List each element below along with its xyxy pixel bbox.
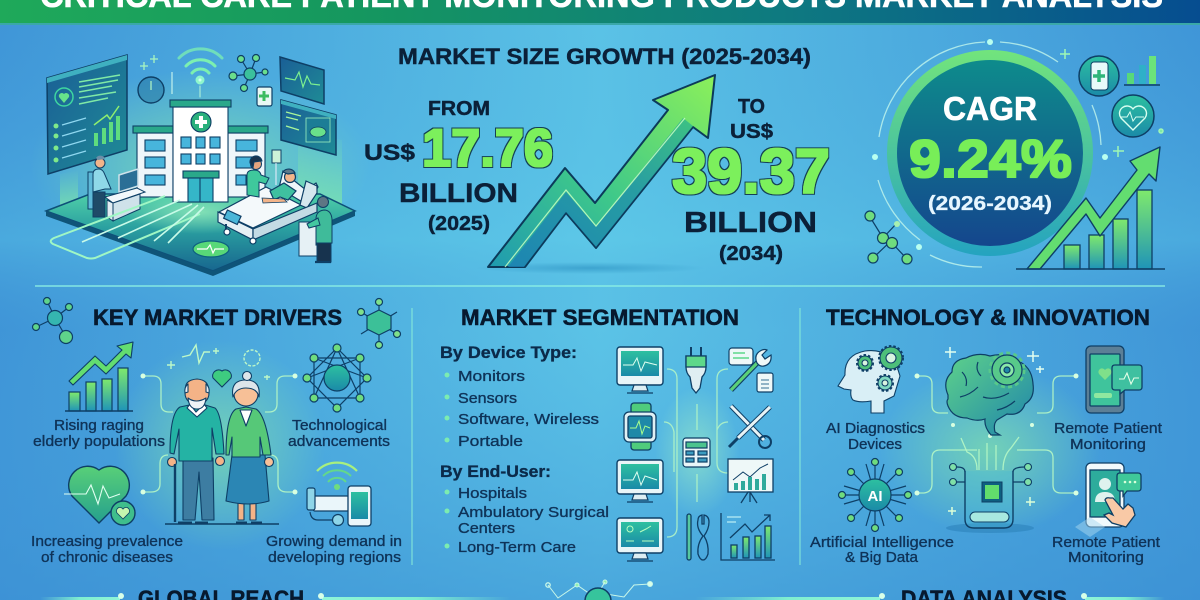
text: rising elderly populations: elderly populations [33,433,165,450]
hospital building [133,100,268,202]
list: by end user: Hospitals [458,485,527,502]
heading: KEY MARKET DRIVERS [93,305,342,330]
list: by device type [440,343,599,450]
icon: AI diagnostics head [838,346,903,413]
bottom band: global reach [40,586,510,600]
connectors [140,374,298,494]
list: by device type: Monitors [458,368,525,385]
icon: central module [683,438,710,467]
nurse [247,150,281,197]
icon: bar and line chart [721,513,775,560]
connectors [664,369,728,537]
icon: monitor 3 [617,518,663,561]
text: developing regions: developing regions [268,549,401,566]
elderly couple [165,372,279,524]
data screen left [47,55,127,174]
text: ai diagnostics devices [826,420,925,453]
icon: plug [686,347,706,393]
to value: 39.37 [672,137,830,207]
text: remote patient monitoring: Monitoring [1070,436,1146,453]
sparkles [1060,49,1163,157]
icon: mini bars [1124,56,1160,85]
list: by end user: By End-User: [440,462,551,481]
growth arrow [475,75,715,274]
bottom band: data analysis [695,586,1165,600]
text: artificial intelligence [810,534,954,566]
icon: wifi [179,49,222,97]
list: by end user: Ambulatory Surgical [458,504,609,521]
from value: BILLION [399,178,518,208]
icon: remote monitoring phone [1086,346,1142,413]
list: by device type: Portable [458,433,523,450]
list: by device type: Sensors [458,390,517,407]
section divider [35,285,1165,287]
text: technological advancements: Technological [292,417,387,434]
from value [364,98,553,235]
text: ai diagnostics devices: AI Diagnostics [826,420,925,437]
icon: molecule left [32,298,72,344]
platform emblem [193,241,229,257]
text: remote patient monitoring lower: Monitoring [1068,549,1144,566]
icon: network centre bottom [546,580,652,600]
from value: US$ [364,140,415,165]
CAGR badge: CAGR [943,90,1037,127]
sparkles and clock [138,55,172,103]
text: remote patient monitoring lower [1052,534,1161,566]
to value: BILLION [684,207,817,239]
to value: (2034) [719,243,783,265]
panel: market segmentation [440,305,775,561]
connectors [914,374,1078,496]
to value: US$ [730,121,773,143]
list: by device type: Software, Wireless [458,411,599,428]
market size growth heading: MARKET SIZE GROWTH (2025-2034) [398,44,811,69]
icon: hexagon molecule [358,298,400,348]
to value [672,96,830,265]
CAGR badge: 9.24% [909,130,1072,189]
CAGR badge [872,39,1108,267]
from value: 17.76 [422,119,553,178]
heading: TECHNOLOGY & INNOVATION [826,305,1150,330]
to value: TO [738,96,765,118]
panel: key market drivers [31,298,402,566]
platform [46,190,355,276]
icon: remote monitoring phone with hand [1075,463,1141,537]
icon: connected phone device [307,463,371,526]
text: remote patient monitoring [1054,420,1163,453]
panel: technology and innovation [810,305,1163,566]
text: chronic diseases [31,533,183,566]
icon: heart above couple [213,370,231,387]
icon: IV bag [257,87,272,106]
text: artificial intelligence: Artificial Intelligence [810,534,954,551]
heading: MARKET SEGMENTATION [461,305,739,330]
icon: brain with gear [946,353,1033,435]
list: by end user [440,462,609,556]
from value: (2025) [428,213,490,235]
text: artificial intelligence: & Big Data [845,549,919,566]
list: by end user: Centers [458,520,515,537]
text: remote patient monitoring lower: Remote Patient [1052,534,1161,551]
icon: heart with pulse [64,466,135,525]
growth chart with arrow [1016,147,1165,269]
text: developing regions [266,533,402,566]
illustration: connected hospital [30,49,370,276]
text: rising elderly populations [33,417,165,450]
icon: AI hub: AI [868,488,882,505]
icon: AI hub [838,458,912,532]
icon: network globe [303,344,371,412]
text: chronic diseases: Increasing prevalence [31,533,183,550]
list: by device type: By Device Type: [440,343,577,362]
icon: crossed tools [729,406,771,448]
monitor screens right [280,57,336,155]
title banner [0,0,1200,25]
text: remote patient monitoring: Remote Patient [1054,420,1163,437]
icon: wrench and clipboard [729,348,773,392]
icon: monitor 2 [617,460,663,502]
text: technological advancements: advancements [288,433,390,450]
icon: molecule [229,54,268,92]
patient bed [218,169,318,244]
icon: chart board [728,459,773,503]
icon: molecule bottom [865,211,912,264]
CAGR badge: (2026-2034) [928,193,1052,215]
icon: mobile health [1079,56,1119,96]
sparkles [945,347,1044,373]
text: ai diagnostics devices: Devices [848,436,902,453]
text: rising elderly populations: Rising raging [54,417,144,434]
icon: chip device [946,464,1035,533]
icon: heart pulse [1112,95,1154,137]
text: developing regions: Growing demand in [266,533,402,550]
list: by end user: Long-Term Care [458,539,576,556]
sparkle motifs [167,345,270,380]
circuit lines [51,196,204,258]
text: technological advancements [288,417,390,450]
icon: rising bars [65,342,133,411]
doctor at workstation [88,156,145,221]
icon: smartwatch [624,403,656,450]
icon: monitor 1 [617,347,663,393]
icon: surgical tools [687,514,709,560]
from value: FROM [428,98,490,120]
text: chronic diseases: of chronic diseases [41,549,173,566]
doctor with cart [299,196,332,262]
